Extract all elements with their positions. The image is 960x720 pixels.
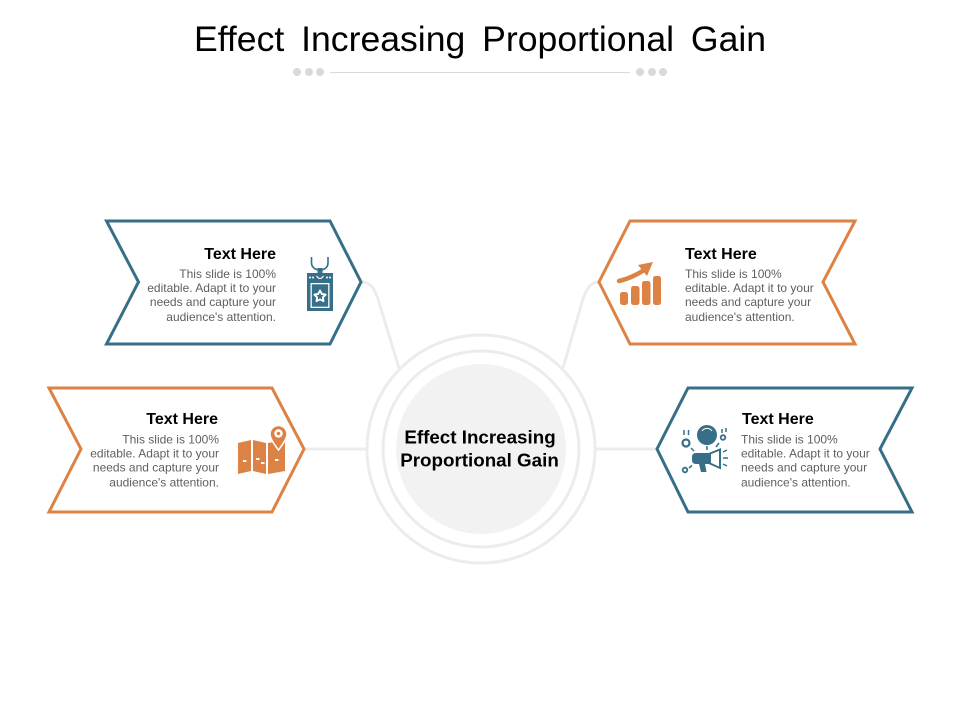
central circle: Proportional Gain [400, 450, 559, 470]
title: Effect Increasing Proportional Gain [194, 19, 766, 59]
text block: bottom right: editable. Adapt it to your [741, 446, 870, 460]
panel: top left [106, 221, 361, 344]
text block: bottom left: needs and capture your [93, 460, 219, 474]
panel: bottom left [49, 388, 304, 512]
icon: badge [307, 257, 333, 311]
text block: bottom left: This slide is 100% [122, 432, 219, 446]
text block: top right: This slide is 100% [685, 267, 782, 281]
connectors [305, 282, 656, 449]
text block: top left: This slide is 100% [179, 267, 276, 281]
text block: bottom right: audience's attention. [741, 476, 851, 490]
text block: top right: audience's attention. [685, 310, 795, 324]
text block: top right: editable. Adapt it to your [685, 281, 814, 295]
panel: top right [599, 221, 855, 344]
central circle [367, 335, 595, 563]
icon: megaphone with idea [682, 425, 728, 472]
heading: bottom left: Text Here [146, 411, 218, 428]
text block: bottom right: This slide is 100% [741, 432, 838, 446]
text block: top left: editable. Adapt it to your [147, 281, 276, 295]
heading: top left: Text Here [204, 246, 276, 263]
icon: map with pin [238, 426, 287, 474]
text block: top left: needs and capture your [150, 295, 276, 309]
title divider [293, 68, 667, 76]
text block: bottom left: audience's attention. [109, 476, 219, 490]
text block: bottom right: needs and capture your [741, 460, 867, 474]
text block: top right: needs and capture your [685, 295, 811, 309]
text block: bottom left: editable. Adapt it to your [90, 446, 219, 460]
text block: top left: audience's attention. [166, 310, 276, 324]
central circle: Effect Increasing [404, 426, 556, 448]
panel: bottom right [657, 388, 912, 512]
heading: bottom right: Text Here [742, 411, 814, 428]
icon: rising bar chart [619, 262, 661, 305]
heading: top right: Text Here [685, 246, 757, 263]
